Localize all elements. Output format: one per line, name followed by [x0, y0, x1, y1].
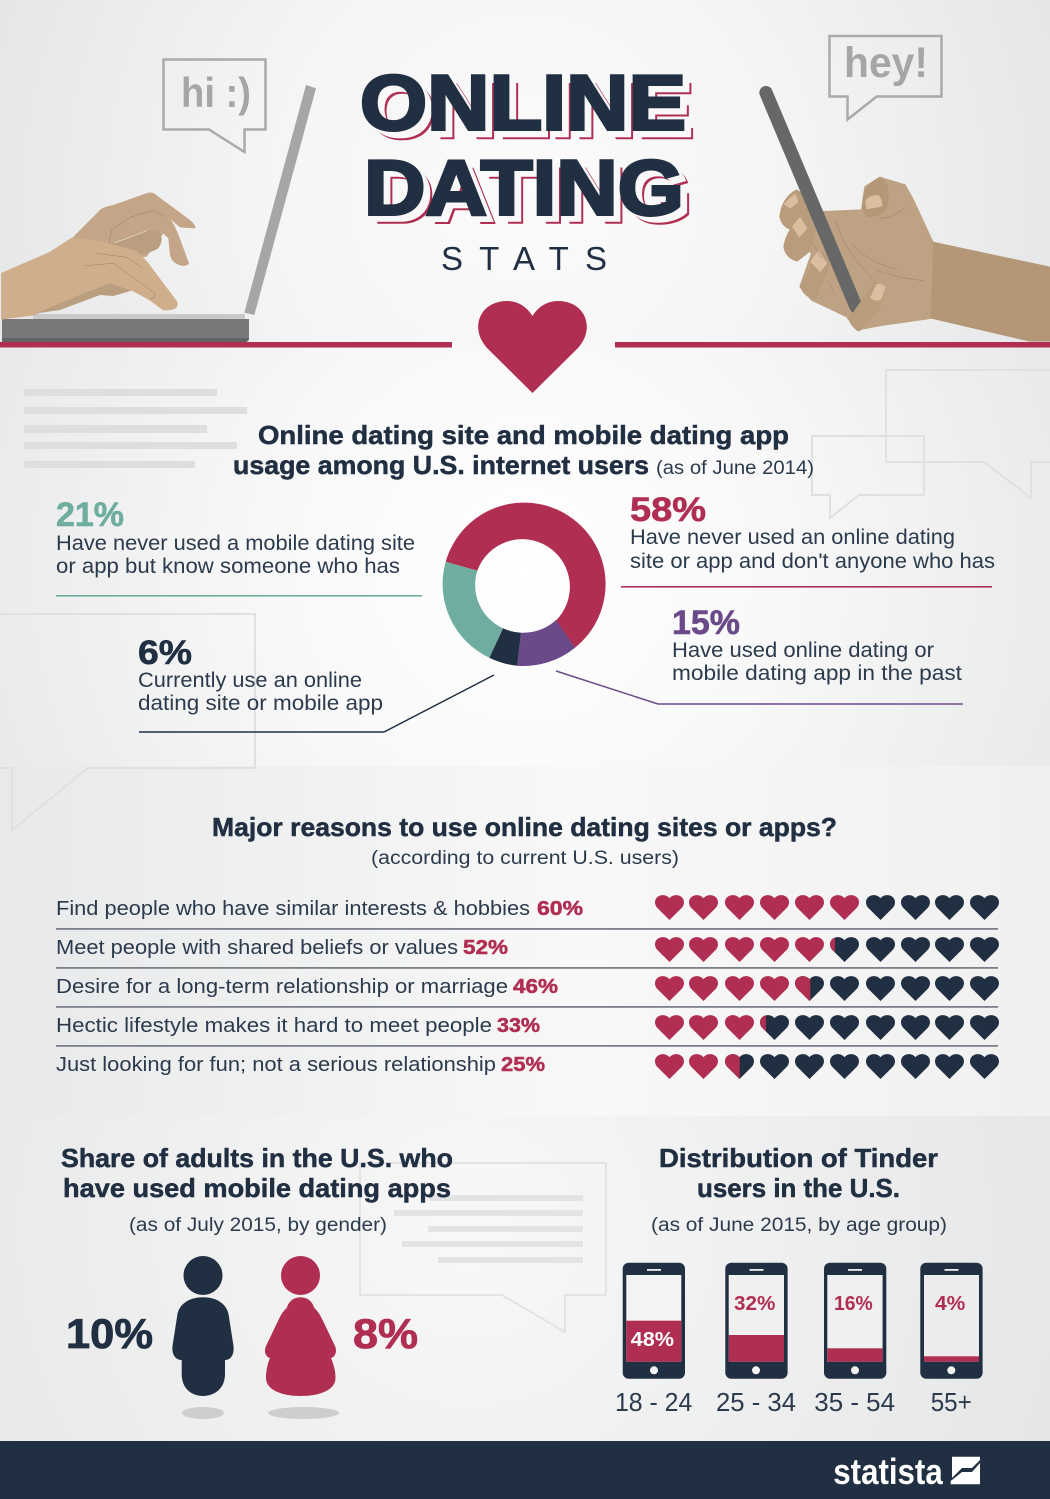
stat: 58% [621, 491, 995, 588]
heading: (as of June 2015, by age group) [651, 1215, 947, 1236]
heading [212, 812, 837, 869]
row: long-term relationship 46% [56, 976, 999, 1001]
heading: Online dating site and mobile dating app [258, 420, 789, 450]
stat: 15%: mobile dating app in the past [672, 662, 962, 685]
row: shared beliefs 52%: 52% [463, 937, 508, 959]
stat: 21%: Have never used a mobile dating site [56, 532, 415, 555]
phone: 35-54 16%: 16% [834, 1293, 873, 1315]
laptop keyboard [2, 314, 249, 342]
icon: big heart [478, 301, 587, 393]
title line: DATING: DATING [371, 150, 691, 238]
phone edge [766, 93, 856, 307]
phone: 25-34 32%: 32% [734, 1293, 776, 1315]
phone: 55+ 4% [920, 1263, 983, 1417]
stat: 58%: Have never used an online dating [630, 526, 955, 549]
row: similar interests 60%: 60% [537, 898, 583, 920]
title line: DATING: DATING [373, 152, 693, 240]
row: hectic lifestyle 33%: 33% [497, 1015, 540, 1037]
heading: Share of adults in the U.S. who [61, 1143, 453, 1173]
phone: 25-34 32% [716, 1263, 796, 1417]
typing hand [2, 192, 195, 319]
row: hectic lifestyle 33% [56, 1015, 999, 1040]
icon: woman [265, 1256, 336, 1396]
row: long-term relationship 46%: 46% [513, 976, 558, 998]
stat: 21% [56, 496, 422, 597]
illustration: hand typing on laptop [2, 85, 316, 342]
title line: ONLINE: ONLINE [360, 58, 686, 146]
heading: usage among U.S. internet users [233, 450, 649, 480]
laptop screen edge [244, 85, 316, 315]
row: just for fun 25% [56, 1054, 999, 1079]
title line: DATING: DATING [364, 144, 684, 232]
stat: men 10%: 10% [66, 1310, 153, 1357]
row: hectic lifestyle 33%: Hectic lifestyle makes it hard to meet people [56, 1015, 492, 1037]
stat: 21%: or app but know someone who has [56, 555, 400, 578]
heading [61, 1143, 453, 1236]
row: similar interests 60%: Find people who have similar interests & hobbies [56, 898, 530, 920]
stat: 15%: Have used online dating or [672, 639, 934, 662]
divider lines [0, 342, 1050, 348]
speech bubble: hi: hi :) [181, 69, 251, 116]
panel: Tinder users by age [615, 1143, 983, 1417]
heading: Distribution of Tinder [659, 1143, 938, 1173]
heading: (according to current U.S. users) [371, 848, 679, 869]
heading: (as of July 2015, by gender) [129, 1215, 387, 1236]
stat: 58%: site or app and don't anyone who has [630, 550, 995, 573]
title line: ONLINE: ONLINE [367, 65, 693, 153]
phone: 35-54 16% [814, 1263, 895, 1417]
stat: 6%: Currently use an online [138, 669, 362, 692]
stat: 6% [138, 634, 494, 732]
shadow: woman [268, 1407, 339, 1419]
illustration: hand holding phone [766, 93, 1050, 342]
heading: have used mobile dating apps [63, 1173, 451, 1203]
forearm and hand [766, 93, 1050, 342]
stat: 21%: 21% [56, 496, 124, 534]
title line: ONLINE: ONLINE [369, 67, 695, 155]
background decorative speech bubbles [0, 370, 1050, 1332]
phone: 18-24 48%: 18 - 24 [615, 1387, 692, 1417]
brand name: statista [833, 1451, 944, 1492]
phone: 35-54 16%: 35 - 54 [814, 1387, 895, 1417]
heading: (as of June 2014) [656, 458, 814, 479]
panel: mobile dating apps by gender [61, 1143, 453, 1419]
row: long-term relationship 46%: Desire for a long-term relationship or marriage [56, 976, 508, 998]
icon: brand logo [951, 1457, 980, 1484]
stat: 15%: 15% [672, 604, 740, 642]
speech bubble: hi [164, 60, 266, 152]
row: just for fun 25%: 25% [501, 1054, 545, 1076]
phone: 55+ 4%: 55+ [931, 1387, 972, 1417]
row: just for fun 25%: Just looking for fun; not a serious relationship [56, 1054, 496, 1076]
row: similar interests 60% [56, 895, 999, 920]
heading: users in the U.S. [697, 1173, 900, 1203]
speech bubble: hey: hey! [844, 39, 928, 87]
stat: 15% [556, 604, 963, 704]
panel: major reasons [56, 812, 999, 1079]
stat: 6%: 6% [138, 634, 192, 672]
heading [233, 420, 814, 480]
phone: 55+ 4%: 4% [935, 1293, 966, 1315]
stat: 58%: 58% [630, 491, 706, 529]
icon: man [172, 1256, 234, 1396]
stat: women 8%: 8% [353, 1310, 418, 1357]
phone: 25-34 32%: 25 - 34 [716, 1387, 796, 1417]
speech bubble: hey [830, 36, 942, 120]
stat: 6%: dating site or mobile app [138, 692, 383, 715]
donut chart [443, 503, 606, 666]
subtitle: STATS: STATS [441, 240, 607, 277]
row: shared beliefs 52%: Meet people with shared beliefs or values [56, 937, 458, 959]
footer bar [0, 1441, 1050, 1499]
phone: 18-24 48% [615, 1263, 692, 1417]
shadow: man [182, 1407, 224, 1419]
row: shared beliefs 52% [56, 937, 999, 962]
title [360, 58, 695, 277]
heading [651, 1143, 947, 1236]
panel: usage among internet users [56, 420, 995, 732]
heading: Major reasons to use online dating sites or apps? [212, 812, 837, 842]
phone: 18-24 48%: 48% [631, 1329, 674, 1351]
